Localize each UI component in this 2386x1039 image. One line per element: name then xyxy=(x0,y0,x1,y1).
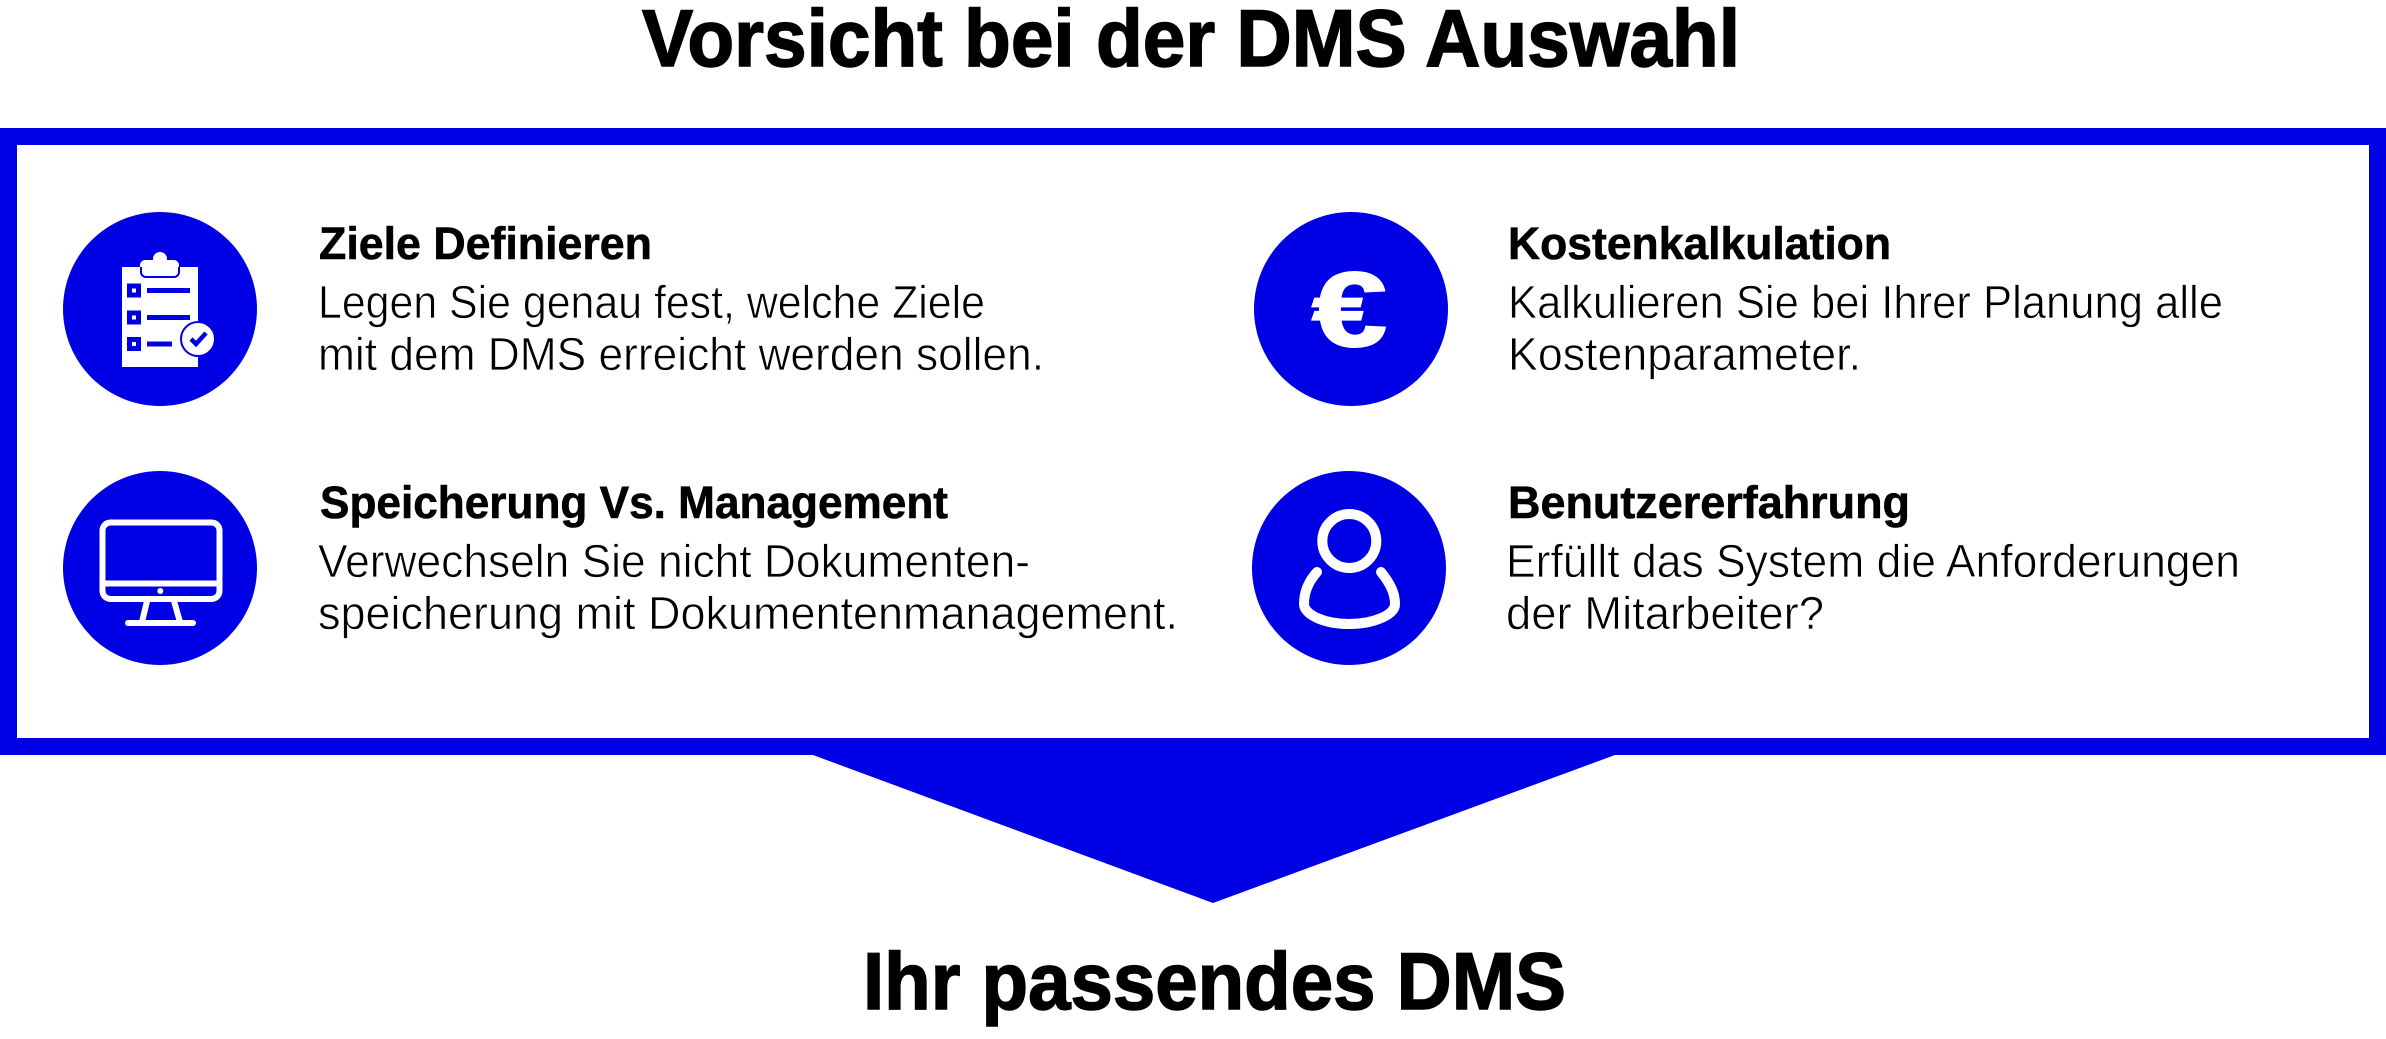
heading: Kostenkalkulation xyxy=(1508,218,1891,269)
heading: Benutzererfahrung xyxy=(1508,477,1910,528)
icon: user xyxy=(1252,471,1446,665)
heading: Speicherung Vs. Management xyxy=(320,477,948,528)
item: Ziele Definieren xyxy=(63,212,1044,406)
body text: der Mitarbeiter? xyxy=(1506,587,1824,639)
icon: clipboard checklist xyxy=(63,212,257,406)
item: Kostenkalkulation xyxy=(1254,212,2223,406)
item: Speicherung Vs. Management xyxy=(63,471,1178,665)
body text xyxy=(1508,276,2223,380)
body text: Erfüllt das System die Anforderungen xyxy=(1506,535,2240,587)
body text xyxy=(318,535,1178,639)
icon: desktop monitor xyxy=(63,471,257,665)
arrow: funnel pointing down xyxy=(813,738,1615,903)
body text: Kostenparameter. xyxy=(1508,328,1861,380)
body text: Kalkulieren Sie bei Ihrer Planung alle xyxy=(1508,276,2223,328)
body text xyxy=(318,276,1044,380)
body text: speicherung mit Dokumentenmanagement. xyxy=(318,587,1178,639)
body text: Verwechseln Sie nicht Dokumenten- xyxy=(318,535,1030,587)
body text: mit dem DMS erreicht werden sollen. xyxy=(318,328,1044,380)
icon: euro sign: € xyxy=(1312,251,1387,369)
panel: criteria frame xyxy=(0,128,2386,755)
body text: Legen Sie genau fest, welche Ziele xyxy=(318,276,985,328)
item: Benutzererfahrung xyxy=(1252,471,2240,665)
heading: Ziele Definieren xyxy=(319,218,652,269)
conclusion heading: Ihr passendes DMS xyxy=(863,937,1566,1027)
icon: euro sign xyxy=(1254,212,1448,406)
body text xyxy=(1506,535,2240,639)
